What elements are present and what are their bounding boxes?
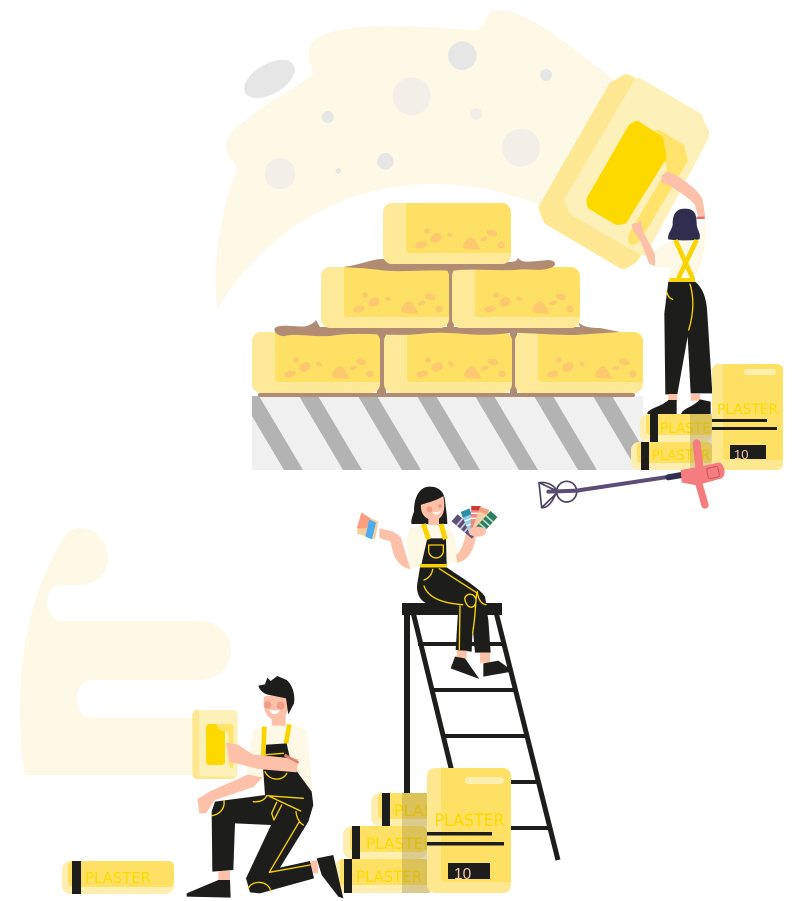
sleeve cuff (284, 754, 299, 764)
small bag C (336, 859, 433, 893)
small bag A (371, 793, 427, 826)
large bag: 10 (734, 447, 748, 462)
raised arm and hand (662, 172, 705, 217)
small bag B: PLASTER (366, 834, 434, 853)
large bag: 10 (454, 866, 472, 883)
woman on ladder with brush and swatches (357, 487, 513, 679)
flying plaster particles (238, 41, 552, 189)
right arm (456, 533, 476, 563)
small bag 2 (631, 442, 712, 470)
colour swatch fan (452, 506, 497, 539)
stepladder (402, 603, 558, 860)
shirt (652, 217, 706, 279)
tipping plaster bag (546, 82, 705, 262)
bottom plaster bag stack (336, 768, 511, 893)
large bag (712, 364, 783, 470)
trousers and bib (212, 743, 314, 893)
hair (668, 209, 700, 240)
legs and shoes (668, 394, 700, 402)
front arm and hand (226, 742, 298, 772)
brick wall (252, 203, 643, 397)
small bag C: PLASTER (356, 867, 422, 886)
crossed straps (675, 240, 697, 278)
shirt (406, 525, 459, 569)
raised arm cuff (697, 217, 705, 219)
overalls stitching (212, 753, 310, 891)
top woman pouring plaster (632, 172, 712, 414)
face (421, 496, 444, 525)
lower arm and hand (197, 774, 263, 813)
ankles and shoes (457, 651, 490, 663)
hand holding swatches (469, 527, 486, 537)
small bag B (343, 826, 434, 859)
waist belt (420, 564, 447, 567)
concrete base with diagonal stripes (240, 396, 656, 470)
lone plaster bag (62, 861, 174, 894)
background swoosh: bottom (20, 528, 231, 775)
paintbrush and hand (357, 513, 400, 541)
held bag (192, 710, 238, 779)
legs and shoes (218, 860, 318, 881)
overalls trousers (417, 567, 491, 653)
large bag: PLASTER (434, 811, 505, 831)
overalls stitching (424, 569, 486, 649)
straps (263, 724, 289, 756)
small bag 1: PLASTER (660, 421, 720, 437)
head (258, 676, 294, 726)
lowered arm and hand (632, 220, 655, 266)
belt (669, 278, 695, 282)
man kneeling holding plaster bag (187, 676, 343, 898)
small bag 1 (640, 414, 712, 442)
mixing drill (539, 443, 725, 508)
top plaster bag stack (631, 364, 783, 470)
shirt (246, 724, 313, 793)
large bag: PLASTER (717, 402, 778, 418)
background swoosh: top (216, 10, 620, 310)
lone plaster bag: PLASTER (85, 869, 151, 887)
small bag A: PLASTER (394, 801, 464, 820)
small bag 2: PLASTER (652, 448, 710, 464)
trousers (664, 282, 712, 394)
left arm (390, 537, 411, 569)
large bag (427, 768, 511, 893)
hair (411, 487, 447, 524)
overalls bib (421, 524, 447, 566)
